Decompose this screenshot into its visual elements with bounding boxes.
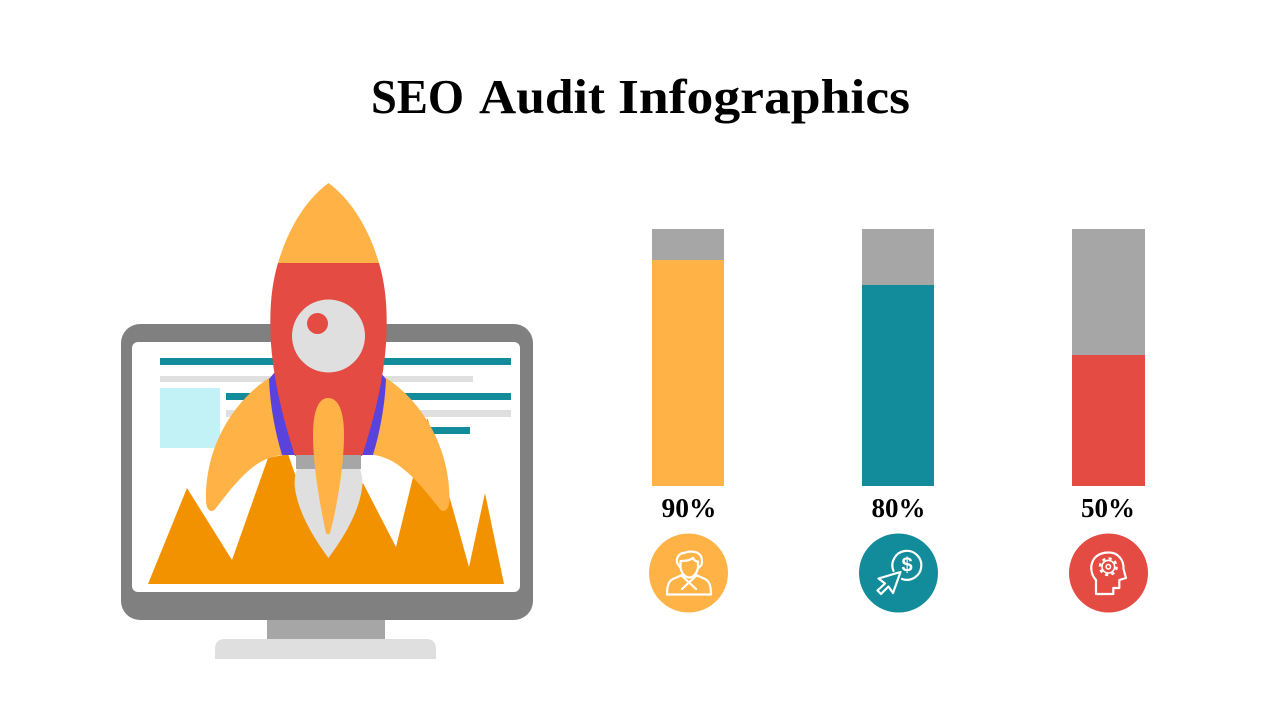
right fin [368,378,450,511]
rocket body [270,263,387,456]
title [371,69,910,124]
monitor screen [132,342,520,592]
icon: person in suit [649,534,728,612]
icon: cursor with dollar coin: $ [901,554,913,576]
monitor stand [215,618,436,659]
label 50%: 50% [1081,493,1135,523]
illustration: rocket launching from monitor [121,183,533,659]
label 90%: 90% [662,493,716,523]
engine exhaust grey [295,469,362,558]
icon: cursor with dollar coin [859,534,938,612]
title: SEO [371,69,464,124]
rocket nose cone [278,183,379,263]
rocket [206,183,450,558]
screen content lines [160,358,511,448]
title: Audit [479,69,606,124]
title: Infographics [618,69,910,124]
bar 90% [652,229,724,486]
monitor frame [121,324,533,620]
engine nozzle [296,455,361,469]
bar 80% [862,229,934,486]
label 80%: 80% [872,493,926,523]
bar 50% [1072,229,1145,486]
left fin [206,378,288,511]
rocket side stripes [269,372,386,455]
exhaust flames [148,418,504,584]
rocket centre fin [313,398,344,534]
porthole [292,300,365,372]
icon: head with gear [1069,534,1148,612]
